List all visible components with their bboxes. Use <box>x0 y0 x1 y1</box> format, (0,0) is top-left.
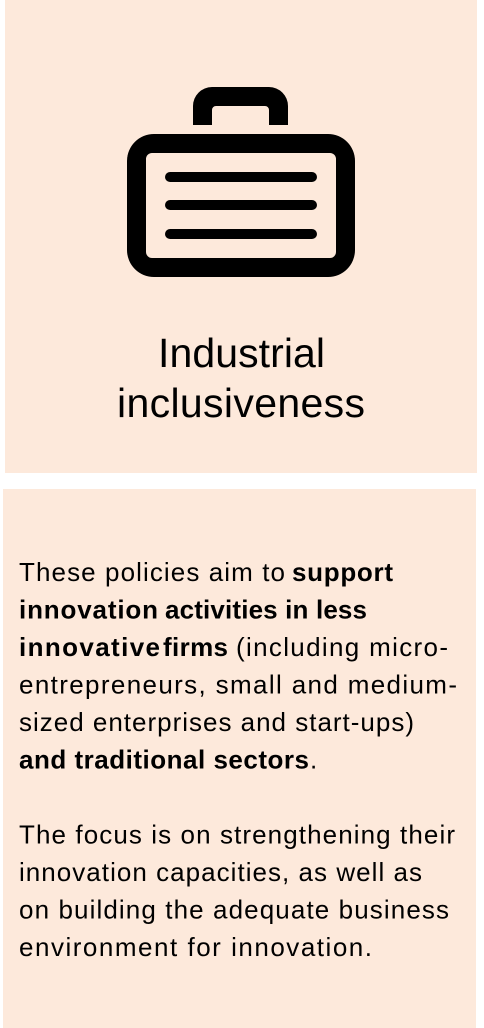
text block: focus: on building the adequate business <box>19 894 449 924</box>
heading: Industrial <box>158 330 325 376</box>
text block: focus <box>19 820 455 962</box>
text block: policy aim: sized enterprises and start-ups) <box>19 707 414 737</box>
heading <box>117 330 365 426</box>
text block: focus: The focus is on strengthening their <box>19 820 455 850</box>
panel: description <box>3 489 476 1028</box>
icon: briefcase <box>127 87 355 277</box>
text block: focus: environment for innovation. <box>19 932 372 962</box>
heading: inclusiveness <box>117 380 365 426</box>
panel: industrial inclusiveness header <box>5 0 477 473</box>
text block: policy aim <box>19 557 457 774</box>
text block: policy aim: activities in less <box>165 594 367 624</box>
text block: policy aim: innovative <box>19 632 160 662</box>
text block: policy aim: (including micro- <box>236 632 448 662</box>
text block: policy aim: These policies aim to <box>19 557 285 587</box>
text block: policy aim: firms <box>163 632 228 662</box>
text block: policy aim: support <box>292 557 393 587</box>
text block: policy aim: . <box>310 744 317 774</box>
text block: policy aim: and traditional sectors <box>19 744 309 774</box>
text block: policy aim: entrepreneurs, small and medium- <box>19 670 457 700</box>
text block: policy aim: innovation <box>19 594 158 624</box>
text block: focus: innovation capacities, as well as <box>19 857 422 887</box>
